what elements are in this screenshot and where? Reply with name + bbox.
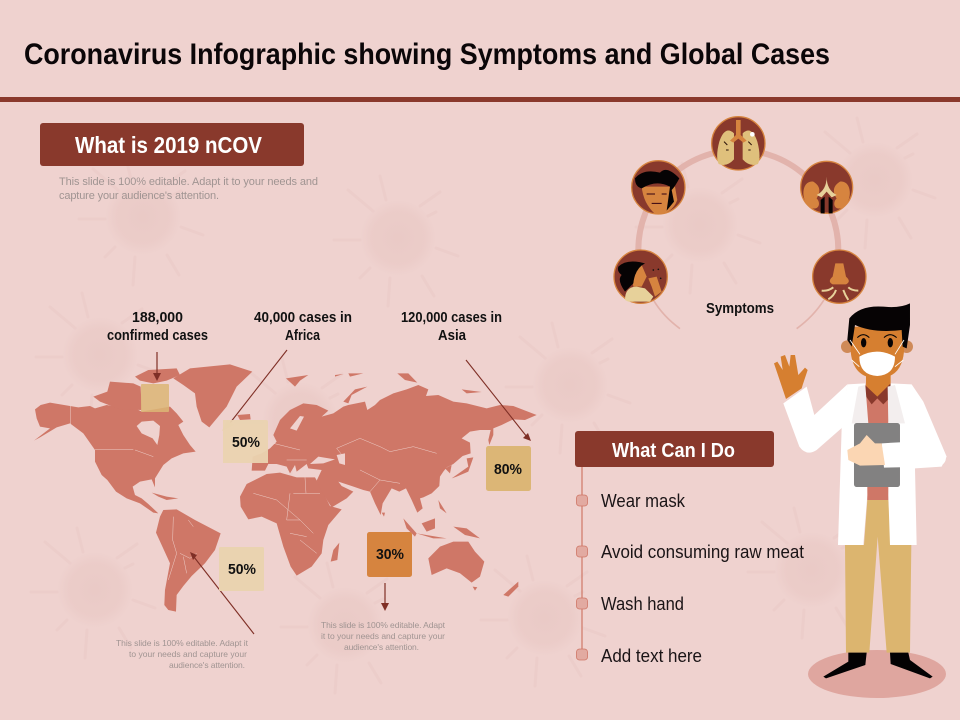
callout: 40,000 cases in Africa: Africa <box>285 328 321 344</box>
arrow: 30 percent <box>381 583 389 611</box>
eurasia, africa and oceania <box>240 373 537 597</box>
icon: nose <box>813 250 866 303</box>
symptoms label: Symptoms <box>706 300 774 317</box>
caption: 30 percent <box>321 620 446 652</box>
tablet <box>854 423 900 487</box>
callout: 188,000 confirmed cases <box>107 310 208 344</box>
caption: South America <box>116 638 249 670</box>
hand waving <box>774 355 808 399</box>
arrow: Africa <box>222 350 287 431</box>
virus watermark pattern <box>31 118 935 693</box>
caption: South America: to your needs and capture your <box>129 649 247 659</box>
item: wash hand: Wash hand <box>601 593 684 614</box>
caption: 30 percent: This slide is 100% editable. Adapt <box>321 620 446 630</box>
stat box 80% Asia <box>486 446 531 491</box>
neck <box>866 368 891 408</box>
caption: 30 percent: it to your needs and capture your <box>321 631 445 641</box>
callout: 188,000 confirmed cases: confirmed cases <box>107 328 208 344</box>
small marker box <box>141 384 169 412</box>
arrow: South America <box>190 552 254 634</box>
intro text: capture your audience's attention. <box>59 190 219 202</box>
shirt <box>864 383 891 500</box>
action list <box>576 467 804 666</box>
americas and greenland <box>34 364 252 612</box>
world map <box>34 364 537 612</box>
face mask <box>859 352 895 376</box>
stat box 30% <box>367 532 412 577</box>
item: wear mask: Wear mask <box>601 490 686 511</box>
icon: kidneys <box>801 161 853 213</box>
upper body <box>774 303 947 545</box>
stat box 50% South America: 50% <box>228 561 256 578</box>
callout: 120,000 cases in Asia: Asia <box>438 328 467 344</box>
callout: 188,000 confirmed cases: 188,000 <box>132 310 183 326</box>
icon: coughing person <box>614 250 667 303</box>
stat box 50% Africa <box>223 420 268 463</box>
caption: South America: This slide is 100% editable. Adapt it <box>116 638 249 648</box>
symptoms diagram <box>614 117 866 329</box>
head <box>841 340 854 353</box>
stat box 50% South America <box>219 547 264 591</box>
arrow: Asia <box>466 360 531 441</box>
arrow: confirmed cases <box>153 352 161 381</box>
caption: 30 percent: audience's attention. <box>344 642 419 652</box>
callout: 40,000 cases in Africa <box>254 310 352 344</box>
heading: What Can I Do: What Can I Do <box>612 440 735 462</box>
intro text: This slide is 100% editable. Adapt it to your needs and <box>59 176 318 188</box>
waving sleeve <box>783 384 847 453</box>
heading: What is 2019 nCOV <box>40 123 304 166</box>
eyes <box>861 338 893 347</box>
icon: headache face <box>632 161 685 214</box>
sleeve <box>882 442 946 468</box>
title: Coronavirus Infographic showing Symptoms and Global Cases <box>24 38 830 71</box>
stat box 30%: 30% <box>376 546 404 563</box>
callout: 120,000 cases in Asia: 120,000 cases in <box>401 310 502 326</box>
item: avoid consuming raw meat: Avoid consuming raw meat <box>601 541 804 562</box>
caption: South America: audience's attention. <box>169 660 245 670</box>
heading: What Can I Do <box>575 431 774 467</box>
icon: lungs <box>712 117 765 170</box>
doctor illustration <box>774 303 947 698</box>
stat box 50% Africa: 50% <box>232 434 260 451</box>
lab coat <box>838 383 867 545</box>
hair <box>847 303 910 348</box>
intro text <box>59 176 318 202</box>
header rule <box>0 97 960 102</box>
stat box 80% Asia: 80% <box>494 461 522 478</box>
hand on tablet <box>847 435 885 466</box>
symptoms arc <box>638 150 838 329</box>
ground ellipse <box>808 650 946 698</box>
trousers and shoes <box>823 500 933 678</box>
callout: 120,000 cases in Asia <box>401 310 502 344</box>
heading: What is 2019 nCOV: What is 2019 nCOV <box>75 132 263 158</box>
callout: 40,000 cases in Africa: 40,000 cases in <box>254 310 352 326</box>
item: add text here: Add text here <box>601 645 702 666</box>
